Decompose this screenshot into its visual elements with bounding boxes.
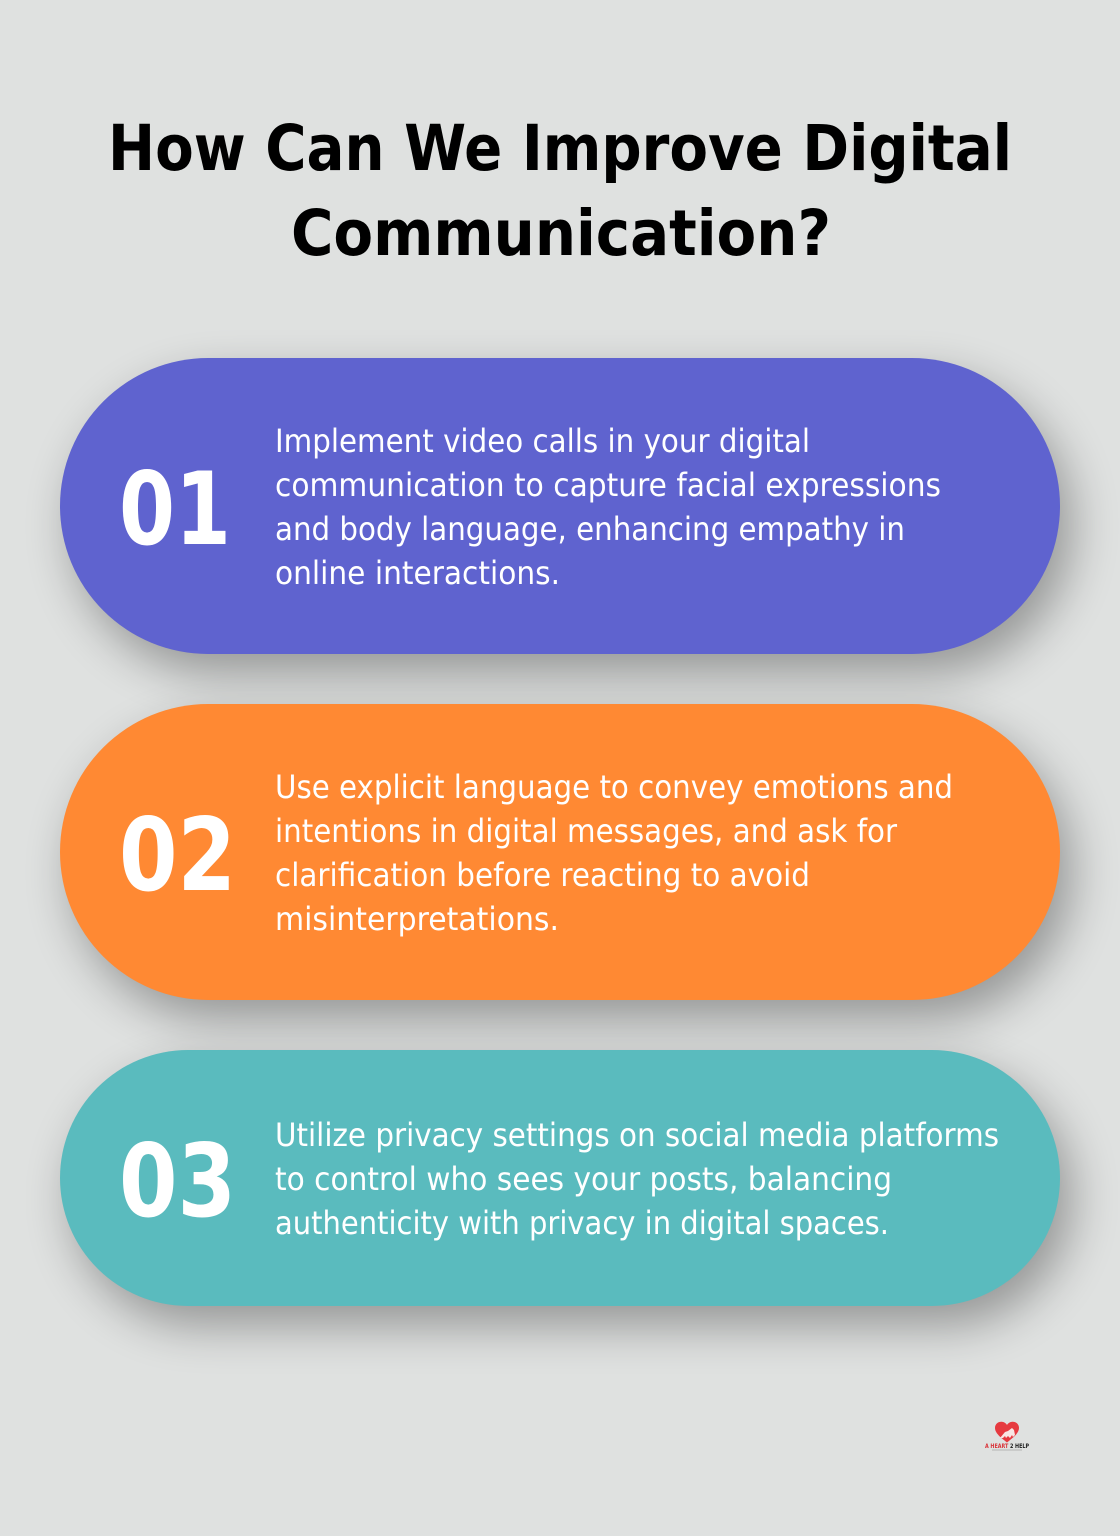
text block: step 02: misinterpretations. bbox=[275, 900, 559, 938]
text block: step 01: communication to capture facial expressions bbox=[275, 466, 941, 504]
panel: step 01 bbox=[60, 358, 1060, 654]
title: Communication? bbox=[291, 197, 831, 270]
number 01: 01 bbox=[119, 450, 231, 568]
text block: step 02 bbox=[275, 768, 953, 938]
text block: step 02: Use explicit language to convey emotions and bbox=[275, 768, 953, 806]
panel: step 02 bbox=[60, 704, 1060, 1000]
text block: step 03 bbox=[275, 1116, 999, 1242]
text block: step 01: and body language, enhancing empathy in bbox=[275, 510, 905, 548]
panel: step 03 bbox=[60, 1050, 1060, 1306]
text block: step 01: Implement video calls in your digital bbox=[275, 422, 810, 460]
title: How Can We Improve Digital bbox=[108, 112, 1012, 185]
icon: A Heart 2 Help logo: A HEART 2 HELP bbox=[985, 1443, 1029, 1450]
text block: step 02: intentions in digital messages, and ask for bbox=[275, 812, 898, 850]
text block: step 03: Utilize privacy settings on social media platforms bbox=[275, 1116, 999, 1154]
text block: step 03: authenticity with privacy in digital spaces. bbox=[275, 1204, 889, 1242]
title bbox=[108, 112, 1012, 270]
text block: step 03: to control who sees your posts, balancing bbox=[275, 1160, 892, 1198]
number 03: 03 bbox=[119, 1122, 236, 1240]
text block: step 01: online interactions. bbox=[275, 554, 560, 592]
icon: A Heart 2 Help logo bbox=[985, 1422, 1029, 1450]
number 02: 02 bbox=[119, 796, 236, 914]
text block: step 01 bbox=[275, 422, 941, 592]
text block: step 02: clarification before reacting to avoid bbox=[275, 856, 810, 894]
